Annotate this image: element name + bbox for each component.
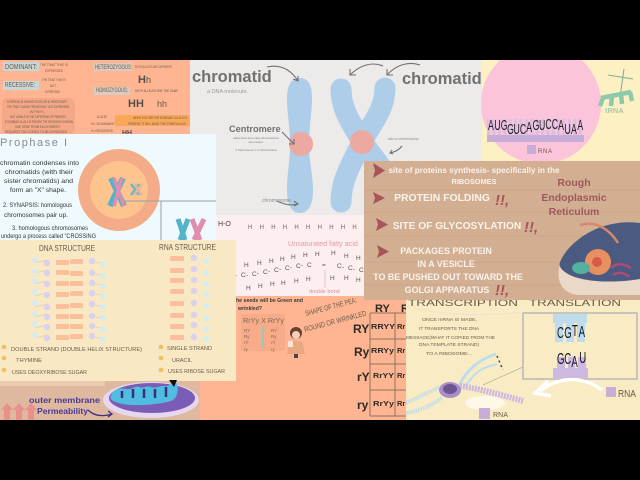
panel: dominant and recessive genetics notes: PRESENT, IT WILL MASK THE OTHER ALLELE: [128, 122, 187, 126]
panel: dominant and recessive genetics notes: ALLELES: [97, 115, 107, 119]
panel: mRNA codons on pink circle: [481, 44, 640, 164]
text: mRNA explanation: IT TRANSPORTS THE DNA: [419, 326, 480, 331]
arrow: white curved arrow: [535, 380, 602, 396]
panel: fatty acid: [216, 215, 364, 296]
heading: chromatid right: chromatid: [402, 70, 482, 88]
text: prophase steps: sister chromatids) and: [4, 179, 73, 185]
icon: tRNA: tRNA: [605, 106, 624, 115]
panel: mitochondrion outer membrane: Permeability: [37, 407, 89, 416]
panel: dominant and recessive genetics notes: EXPRESSED: [45, 68, 63, 73]
heading: rough endoplasmic reticulum: Endoplasmic: [541, 192, 607, 204]
text: cross RrYy X RrYy: [241, 314, 285, 352]
arrows: chromatid pointers: [267, 63, 420, 206]
table: punnett grid: Rr: [397, 371, 405, 380]
table: punnett grid: RRYy: [371, 346, 395, 355]
panel: dominant and recessive genetics notes: h= RECESSIVE: [91, 128, 113, 133]
panel: dominant and recessive genetics notes: THE TRAIT CAN BE PRESENT BUT NOT EXPRESSED: [7, 105, 69, 109]
table: punnett grid: RRYY: [371, 322, 395, 331]
icon: exclamation marks: !!,: [524, 219, 538, 236]
text: cross RrYy X RrYy: Ry: [244, 334, 250, 339]
text: cross RrYy X RrYy: RrYy X RrYy: [243, 318, 285, 325]
panel: dominant and recessive genetics notes: HETEROZYGOUS:: [95, 64, 132, 71]
panel: dominant and recessive genetics notes: REQUIRES TWO COPIES TO BE EXPRESSED: [5, 130, 67, 134]
panel: chromatid diagram: [190, 60, 482, 220]
text: prophase steps: chromosomes pair up.: [4, 213, 68, 219]
text: question about pea seeds: he seeds will be Green and: [236, 298, 303, 304]
text: cross RrYy X RrYy: rY: [244, 340, 248, 345]
text: ribosome function: [388, 166, 560, 186]
label: centromere: 1 Centromere = 1 chromosome: [235, 148, 277, 152]
text: question about pea seeds: wrinkled?: [237, 306, 262, 312]
icon: cell with chromosomes: [78, 149, 160, 231]
panel: dominant and recessive genetics notes: THE TRAIT THAT IS: [42, 77, 66, 82]
list: RNA features: [159, 345, 225, 375]
callout: codon anticodon box: CGTA: [557, 321, 585, 342]
chart: carbon chain: HHHHHHHHHH: [244, 250, 361, 269]
label: mRNA: [527, 145, 552, 155]
panel: peach punnett background: [200, 296, 410, 420]
icon: zoom box chromosomes: [125, 201, 216, 241]
table: punnett grid: RrYy: [373, 399, 395, 408]
text: site of glycosylation: SITE OF GLYCOSYLATION: [393, 221, 521, 232]
icon: mitochondrion: [103, 380, 199, 418]
panel: fatty acid: HHHHHHHHHH: [248, 225, 357, 231]
label: centromere: [229, 124, 281, 152]
table: punnett grid: Ry: [354, 345, 370, 359]
label: mRNA: [479, 408, 508, 419]
text: mRNA explanation: [406, 317, 495, 356]
table: punnett grid: rY: [357, 370, 370, 384]
table: punnett grid: Rr: [397, 346, 405, 355]
panel: dominant and recessive genetics notes: BOTH ALLELES ARE DIFFERENT: [135, 64, 172, 69]
text: prophase steps: 3. homologous chromosomes: [12, 226, 88, 232]
chart: carbon chain: HHHHHHHHH: [246, 275, 361, 292]
heading: unsaturated fatty acid: Unsaturated fatty acid: [288, 239, 358, 248]
text: cross RrYy X RrYy: rY: [271, 340, 276, 345]
panel: dominant and recessive genetics notes: hh: [157, 99, 167, 109]
text: packages protein: [373, 246, 523, 295]
list: DNA features: DOUBLE STRAND (DOUBLE HELIX STRUCTURE): [11, 347, 142, 353]
panel: dominant and recessive genetics notes: Hh: [138, 74, 151, 86]
heading: transcription: TRANSCRIPTION: [408, 298, 518, 308]
text: prophase steps: form an "X" shape.: [10, 188, 66, 194]
panel: dominant and recessive genetics notes: THE TRAIT THAT IS: [40, 62, 68, 67]
list: DNA features: USES DEOXYRIBOSE SUGAR: [12, 370, 87, 376]
label: double bond: double bond: [309, 289, 340, 295]
panel: dominant and recessive genetics notes: EXPRESSED: [45, 89, 60, 94]
icon: exclamation marks: !!,: [495, 282, 509, 299]
panel: dominant and recessive genetics notes: WHEN YOU SEE THE DOMINANT ALLELE IS: [133, 116, 187, 120]
heading: rough endoplasmic reticulum: Rough: [557, 177, 591, 189]
list: RNA features: URACIL: [172, 358, 192, 364]
panel: dominant and recessive genetics notes: [0, 60, 192, 137]
label: tRNA: RNA: [618, 389, 636, 400]
text: question about pea seeds: [236, 298, 303, 312]
panel: fatty acid: H-O: [218, 221, 231, 228]
text: shape of the pea: [303, 296, 368, 334]
panel: dominant and recessive genetics notes: BOTH ALLELES ARE THE SAME: [135, 88, 178, 93]
label: centromere: Centromere: [229, 124, 281, 134]
black bar bottom: [0, 420, 640, 480]
text: cross RrYy X RrYy: ry: [271, 347, 275, 352]
table: punnett grid: Rr: [397, 399, 405, 408]
text: cross RrYy X RrYy: RY: [271, 328, 277, 333]
chart: carbon chain: [235, 250, 364, 292]
icon: girl character: [287, 327, 305, 358]
icon: up arrows: [1, 403, 37, 420]
icon: list arrows: [373, 163, 389, 258]
icon: tRNA: [600, 69, 633, 115]
heading: RNA structure: RNA STRUCTURE: [159, 243, 216, 252]
text: cross RrYy X RrYy: ry: [244, 347, 248, 352]
list: DNA features: [2, 345, 142, 376]
panel: dominant and recessive genetics notes: RECESSIVE:: [5, 82, 35, 89]
heading: Prophase I: Prophase I: [0, 137, 67, 149]
text: codon sequence: AUGGUCAGUCCAUAA: [488, 116, 584, 138]
text: packages protein: PACKAGES PROTEIN: [400, 246, 492, 256]
text: cross RrYy X RrYy: Ry: [271, 334, 277, 339]
text: packages protein: TO BE PUSHED OUT TOWARD THE: [373, 272, 523, 282]
text: packages protein: GOLGI APPARATUS: [405, 285, 489, 295]
text: mRNA explanation: MESSAGE(WHAT IT COPIED FROM THE: [406, 335, 495, 340]
panel: dominant and recessive genetics notes: HOMOZYGOUS:: [96, 87, 128, 94]
text: cross RrYy X RrYy: RY: [244, 328, 250, 333]
text: shape of the pea: ROUND OR WRINKLED: [303, 309, 368, 334]
heading: rough endoplasmic reticulum: Reticulum: [549, 206, 599, 218]
list: DNA features: THYMINE: [16, 358, 42, 364]
chart: RNA single strand: [170, 255, 209, 342]
panel: prophase I: [0, 134, 216, 241]
panel: dominant and recessive genetics notes: IN THE F1: [30, 110, 44, 114]
label: mRNA: RNA: [538, 149, 552, 155]
label: tRNA: [606, 387, 636, 400]
callout: codon anticodon box: [523, 313, 637, 379]
text: mRNA explanation: ONCE mRNA IS MADE,: [422, 317, 477, 322]
chart: carbon chain: -C-C-C-C-C-C-C = C-C-C: [235, 262, 364, 279]
heading: chromatid left: chromatid: [192, 68, 272, 86]
text: shape of the pea: SHAPE OF THE PEA:: [304, 296, 358, 318]
panel: dominant and recessive genetics notes: HH: [128, 98, 144, 110]
text: mRNA explanation: DNA TEMPLATE STRAND): [419, 342, 479, 347]
panel: dominant and recessive genetics notes: A PERSON IS HOMOZYGOUS OR IS HEREDITARY: [7, 100, 68, 104]
panel: dominant and recessive genetics notes: DOMINANT:: [5, 64, 37, 71]
list: RNA features: USES RIBOSE SUGAR: [168, 369, 225, 375]
text: prophase steps: undergo a process called "CROSSING: [1, 234, 96, 240]
panel: dominant and recessive genetics notes: NOT VISIBLE IN THE OFFSPRING OF PARENTS: [10, 115, 67, 119]
panel: dominant and recessive genetics notes: NOT: [50, 83, 56, 88]
list: RNA features: SINGLE STRAND: [167, 346, 212, 352]
text: ribosome function: RIBOSOMES: [452, 179, 497, 186]
heading: DNA structure: DNA STRUCTURE: [39, 244, 95, 253]
table: punnett grid: ry: [357, 398, 369, 412]
label: also a chromosome: also a chromosome: [388, 137, 419, 141]
icon: single chromatid chromosome: [287, 78, 313, 213]
text: ribosome function: site of proteins synthesis- specifically in the: [388, 166, 560, 175]
icon: duplicated X chromosome: [341, 88, 388, 202]
black bar top: [0, 0, 640, 60]
label: mRNA: RNA: [493, 412, 508, 419]
text: protein folding: PROTEIN FOLDING: [394, 193, 490, 204]
icon: transcription bubble: [406, 354, 523, 413]
panel: rough endoplasmic reticulum: [364, 161, 640, 300]
callout: codon anticodon box: GCAU: [557, 348, 586, 371]
icon: cell illustration: [558, 222, 640, 295]
panel: dominant and recessive genetics notes: H= DOMINANT: [91, 121, 115, 126]
icon: exclamation marks: [495, 192, 538, 299]
panel: mitochondrion outer membrane: [0, 380, 200, 420]
heading: rough endoplasmic reticulum: [541, 177, 607, 218]
label: centromere: are present.: [249, 140, 264, 144]
table: punnett grid: RY: [353, 322, 369, 336]
icon: exclamation marks: !!,: [495, 192, 509, 209]
panel: dominant and recessive genetics notes: ONE GENE FROM EACH PARENT: [15, 125, 60, 129]
text: prophase steps: [0, 161, 96, 240]
panel: dominant and recessive genetics notes: HH: [122, 130, 132, 137]
text: prophase steps: chromatin condenses into: [0, 161, 80, 167]
label: centromere: determines how many chromosomes: [233, 136, 279, 140]
table: punnett grid: Rr: [397, 322, 405, 331]
text: packages protein: IN A VESICLE: [417, 259, 475, 269]
text: prophase steps: 2. SYNAPSIS: homologous: [3, 203, 72, 209]
text: outer membrane permeability: outer membrane: [29, 396, 101, 405]
panel: transcription and translation: [406, 298, 640, 420]
text: prophase steps: chromatids (with their: [5, 170, 73, 176]
text: a DNA molecule: a DNA molecule.: [207, 89, 248, 95]
chart: DNA double helix: [32, 257, 106, 342]
text: mRNA explanation: TO A RIBOSOME...: [426, 351, 472, 356]
table: punnett grid: [353, 303, 409, 416]
panel: punnett square: [236, 296, 409, 416]
heading: translation: TRANSLATION: [529, 298, 621, 308]
label: chromosome: chromosome: [262, 198, 291, 204]
table: punnett grid: RrYY: [373, 371, 394, 380]
table: punnett grid: R: [401, 303, 409, 315]
table: punnett grid: RY: [375, 303, 391, 315]
panel: DNA and RNA structure: [0, 240, 236, 381]
panel: dominant and recessive genetics notes: IF DOMINANT ALLELE IS PRESENT THE RECESSIVE IS HIDDEN: [5, 120, 73, 124]
